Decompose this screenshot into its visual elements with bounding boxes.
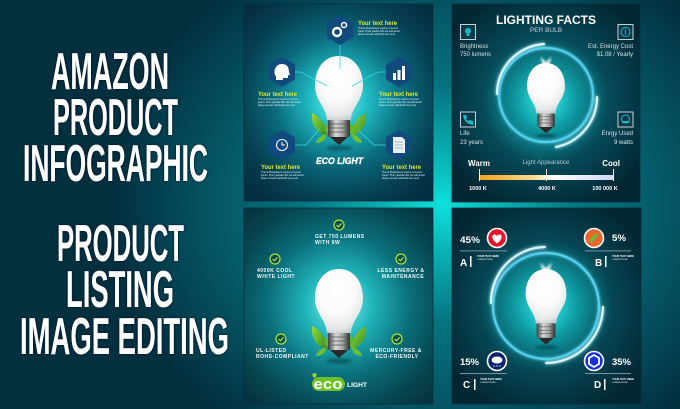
panel background [244, 4, 433, 201]
connector lines [294, 45, 387, 145]
fact: energy used: Enrgy Used [602, 131, 633, 137]
light appearance scale: 4000 K [538, 186, 556, 192]
text block: top [358, 21, 400, 36]
icon: heart [488, 228, 506, 248]
bulb with leaves [312, 56, 366, 150]
benefit: cool white light: WHITE LIGHT [257, 274, 295, 280]
subheading: PER BULB [530, 27, 562, 34]
eco light logo: LIGHT [347, 383, 367, 389]
light appearance scale: Warm [468, 159, 490, 168]
icon: brightness [460, 24, 476, 40]
light appearance scale: Light Appearance [523, 160, 570, 166]
icon: energy cost [618, 24, 633, 40]
text block: bottom right [382, 165, 425, 180]
icon: head [269, 57, 295, 87]
benefit: less energy: MAINTENANCE [382, 274, 424, 280]
stat B: 5% [612, 233, 626, 243]
panel background [452, 208, 641, 404]
stat C [460, 357, 507, 391]
text block: bottom right: Ipsum. Proin gravida nibh vel velit auctor [382, 173, 425, 177]
subtitle: product listing image editing [20, 215, 229, 366]
stat A: YOUR TEXT HERE [477, 255, 499, 258]
title: Amazon product infographic: AMAZON [51, 43, 169, 101]
ring [491, 247, 603, 363]
stat D: 35% [612, 357, 631, 367]
text block: bottom left [261, 165, 304, 180]
bulb with leaves [312, 269, 366, 364]
text block: left: This is Photoshop's version of Lorem [258, 97, 299, 101]
bulb [527, 57, 565, 138]
eco light label: ECO LIGHT [316, 156, 364, 166]
stat C: LOREM IPSUM [480, 382, 495, 384]
light appearance scale: Cool [602, 159, 620, 168]
eco light logo [312, 373, 367, 393]
check icons [270, 220, 406, 344]
icon: clock [269, 130, 295, 160]
benefit: lumens: GET 750 LUMENS [315, 234, 365, 240]
stat D: YOUR TEXT HERE [612, 378, 634, 381]
text block: bottom right: Your text here [382, 165, 422, 171]
fact: energy cost: Est. Energy Cost [588, 44, 633, 50]
subtitle: product listing image editing: LISTING [66, 261, 174, 319]
fact: brightness: Brightness [460, 44, 488, 50]
benefit: cool white light: 4000K COOL [257, 268, 293, 274]
text block: left: Your text here [258, 92, 298, 98]
panel: eco benefits [244, 208, 433, 404]
icon: bar chart [386, 57, 412, 87]
title: Amazon product infographic: INFOGRAPHIC [23, 135, 208, 193]
title: Amazon product infographic [23, 43, 208, 193]
text block: bottom left: This is Photoshop's version of Lorem [261, 170, 302, 174]
text block: right: Your text here [379, 92, 419, 98]
stat C: YOUR TEXT HERE [480, 378, 502, 381]
text block: top: Your text here [358, 21, 398, 27]
benefit: mercury-free: ECO-FRIENDLY [375, 354, 419, 360]
stat A: LOREM IPSUM [477, 259, 492, 261]
benefit: UL-listed: UL-LISTED [256, 348, 287, 354]
text block: left [258, 92, 301, 107]
fact: energy cost: $1.08 / Yearly [597, 52, 633, 58]
text block: left: aliquet. Aenean sollicitudin lorem quis [258, 103, 295, 107]
stat B: B [595, 258, 602, 269]
fact: brightness: 750 lumens [460, 52, 491, 58]
eco light logo: eco [314, 376, 342, 393]
icon: life [460, 112, 476, 127]
panel: eco light diagram [244, 4, 433, 201]
benefit: less energy: LESS ENERGY & [378, 268, 424, 274]
text block: bottom left: Ipsum. Proin gravida nibh vel velit auctor [261, 173, 304, 177]
stat A [460, 235, 507, 269]
light appearance scale: 100 000 K [592, 186, 618, 192]
stat A: A [460, 258, 467, 269]
subtitle: product listing image editing: IMAGE EDITING [20, 308, 229, 366]
panel background [452, 4, 640, 202]
text block: top: Ipsum. Proin gravida nibh vel velit auctor [358, 29, 400, 33]
text block: right: aliquet. Aenean sollicitudin lorem quis [379, 103, 416, 107]
fact: energy used: 9 watts [614, 140, 633, 146]
text block: bottom left: aliquet. Aenean sollicitudin lorem quis [261, 176, 298, 180]
icon: energy used [618, 112, 633, 127]
stat D: LOREM IPSUM [612, 382, 627, 384]
panel: percentages [452, 208, 641, 404]
icon: pencil [584, 228, 604, 248]
text block: right: Ipsum. Proin gravida nibh vel velit auctor [379, 100, 422, 104]
stat C: C [463, 380, 470, 391]
panel: lighting facts [452, 4, 640, 202]
stat A: 45% [460, 235, 480, 245]
text block: bottom left: Your text here [261, 165, 301, 171]
text block: right: This is Photoshop's version of Lorem [379, 97, 420, 101]
fact: life: Life [460, 131, 470, 137]
benefit: lumens: WITH 9W [315, 240, 340, 246]
stat D [585, 357, 634, 391]
text block: top: This is Photoshop's version of Lorem [358, 26, 399, 30]
subtitle: product listing image editing: PRODUCT [57, 215, 184, 273]
text block: bottom right: This is Photoshop's version of Lorem [382, 170, 423, 174]
icon: document [386, 130, 412, 160]
text block: left: Ipsum. Proin gravida nibh vel velit auctor [258, 100, 301, 104]
light appearance scale [468, 159, 620, 192]
icon: gears [327, 15, 353, 45]
heading: LIGHTING FACTS [496, 13, 596, 27]
icon: cloud [488, 352, 506, 370]
title: Amazon product infographic: PRODUCT [53, 89, 178, 147]
light appearance scale: 1000 K [469, 186, 487, 192]
panel background [244, 208, 433, 404]
ring [497, 44, 597, 147]
fact: life: 23 years [460, 140, 483, 146]
text block: right [379, 92, 422, 107]
icon: settings [584, 352, 604, 370]
stat B: LOREM IPSUM [612, 259, 627, 261]
bulb [526, 262, 566, 349]
stat B: YOUR TEXT HERE [612, 255, 634, 258]
text block: bottom right: aliquet. Aenean sollicitudin lorem quis [382, 176, 419, 180]
benefit: UL-listed: ROHS-COMPLIANT [256, 354, 309, 360]
stat B [585, 233, 634, 269]
benefit: mercury-free: MERCURY-FREE & [370, 348, 422, 354]
stat C: 15% [460, 357, 479, 367]
text block: top: aliquet. Aenean sollicitudin lorem quis [358, 32, 395, 36]
stat D: D [594, 380, 601, 391]
